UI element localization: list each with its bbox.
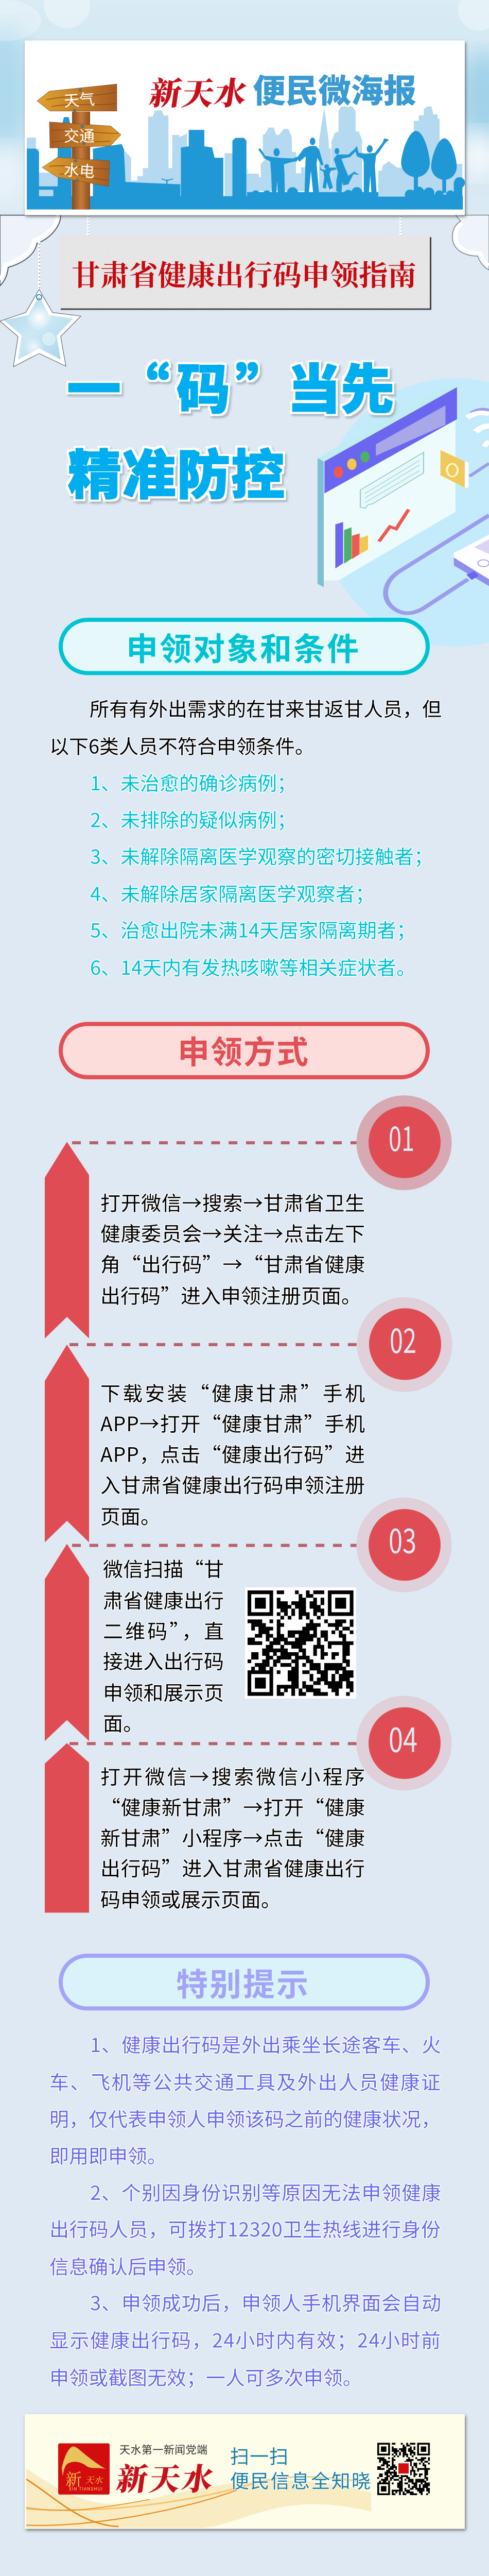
logo xyxy=(58,2443,110,2495)
footer call to action: 便民信息全知晓 xyxy=(230,2466,371,2494)
decorative clouds xyxy=(0,215,489,286)
step 1 xyxy=(45,1095,452,1338)
text xyxy=(100,1761,365,1913)
number badge 02 xyxy=(357,1297,452,1392)
text: eligibility intro: 以下6类人员不符合申领条件。 xyxy=(49,731,315,759)
text: 申领和展示页 xyxy=(103,1677,224,1706)
icon: gear card xyxy=(441,450,468,488)
text: 入甘肃省健康出行码申领注册 xyxy=(100,1470,365,1499)
banner title: 新天水 xyxy=(147,67,250,114)
text: special notes xyxy=(49,2029,441,2391)
sign: 交通 xyxy=(49,122,121,148)
text: “健康新甘肃”→打开“健康 xyxy=(100,1792,365,1821)
number badge 01: 01 xyxy=(389,1112,414,1161)
text xyxy=(103,1554,224,1737)
city skyline illustration xyxy=(27,107,465,210)
banner title: 便民微海报 xyxy=(253,65,416,112)
main title: 先 xyxy=(341,347,394,423)
icon: wooden signpost xyxy=(37,84,121,210)
text: 下载安装“健康甘肃”手机 xyxy=(100,1378,365,1407)
chat bubble xyxy=(360,452,424,509)
text: 肃省健康出行 xyxy=(103,1585,224,1614)
sign: 天气: 天气 xyxy=(63,87,95,111)
QR code xyxy=(245,1587,356,1699)
illustration: isometric browser window and phone xyxy=(318,378,489,647)
list: six excluded categories: 2、未排除的疑似病例； xyxy=(90,805,296,833)
gold waves xyxy=(26,2468,371,2528)
text: 打开微信→搜索微信小程序 xyxy=(100,1761,365,1790)
sign: 天气 xyxy=(37,84,117,112)
section heading: 申领对象和条件 xyxy=(61,620,428,673)
icon: hanging star xyxy=(0,290,81,367)
number badge 04: 04 xyxy=(389,1713,417,1761)
main title xyxy=(67,347,394,509)
logo: 天水 xyxy=(85,2473,103,2486)
text xyxy=(100,1378,365,1530)
text: APP→打开“健康甘肃”手机 xyxy=(100,1409,365,1437)
number badge 04 xyxy=(356,1696,452,1790)
arrow xyxy=(45,1142,89,1338)
text: 健康委员会→关注→点击左下 xyxy=(100,1218,365,1247)
main title: ” xyxy=(236,347,289,423)
footer QR code xyxy=(377,2444,430,2494)
section heading: 特别提示 xyxy=(61,1956,428,2008)
sign: 交通: 交通 xyxy=(64,124,95,146)
section heading: 申领方式: 申领方式 xyxy=(178,1026,308,1073)
step 4 xyxy=(45,1696,452,1913)
text: 微信扫描“甘 xyxy=(103,1554,224,1583)
text: 面。 xyxy=(103,1708,143,1737)
text: special notes: 明，仅代表申领人申领该码之前的健康状况， xyxy=(49,2104,441,2132)
text: 接进入出行码 xyxy=(103,1646,224,1675)
number badge 03 xyxy=(356,1498,452,1592)
arrow xyxy=(45,1345,89,1543)
footer call to action: 扫一扫 xyxy=(230,2441,288,2469)
text: eligibility intro xyxy=(49,693,442,759)
logo: 新 xyxy=(65,2467,82,2490)
icon: wifi arcs xyxy=(467,410,489,447)
arrow xyxy=(45,1743,89,1912)
text: special notes: 申领或截图无效；一人可多次申领。 xyxy=(49,2362,362,2391)
step 3 xyxy=(45,1498,452,1741)
list: six excluded categories xyxy=(90,768,433,980)
list: six excluded categories: 5、治愈出院未满14天居家隔离期者； xyxy=(90,915,416,943)
footer brand text: 新天水 xyxy=(114,2455,217,2499)
text: special notes: 显示健康出行码，24小时内有效；24小时前 xyxy=(49,2325,441,2353)
text: special notes: 2、个别因身份识别等原因无法申领健康 xyxy=(90,2177,441,2206)
number badge 01 xyxy=(356,1095,452,1190)
icon: trees xyxy=(247,131,465,210)
list: six excluded categories: 1、未治愈的确诊病例； xyxy=(90,768,296,796)
text: special notes: 3、申领成功后，申领人手机界面会自动 xyxy=(90,2287,441,2316)
main title: 一 xyxy=(67,347,121,423)
sign: 水电: 水电 xyxy=(63,157,96,182)
main title: “ xyxy=(116,347,169,423)
footer brand text: 天水第一新闻党端 xyxy=(119,2442,207,2457)
section heading: 申领对象和条件: 申领对象和条件 xyxy=(126,623,359,670)
text: 出行码”进入甘肃省健康出行 xyxy=(100,1853,365,1882)
step 2 xyxy=(45,1297,452,1543)
list: six excluded categories: 6、14天内有发热咳嗽等相关症状者。 xyxy=(90,952,416,980)
main title: 当 xyxy=(287,347,341,423)
text: eligibility intro: 所有有外出需求的在甘来甘返甘人员，但 xyxy=(90,693,442,722)
text: special notes: 信息确认后申领。 xyxy=(49,2251,206,2279)
text: 打开微信→搜索→甘肃省卫生 xyxy=(100,1188,365,1216)
list: six excluded categories: 4、未解除居家隔离医学观察者； xyxy=(90,878,375,907)
footer call to action xyxy=(230,2441,371,2494)
text: APP，点击“健康出行码”进 xyxy=(100,1439,365,1468)
subtitle paper sign xyxy=(59,235,431,310)
hanging chains xyxy=(39,215,401,295)
bar chart xyxy=(335,522,368,568)
text: special notes: 1、健康出行码是外出乘坐长途客车、火 xyxy=(90,2029,441,2058)
text xyxy=(100,1188,365,1309)
text: special notes: 即用即申领。 xyxy=(49,2141,167,2169)
text: 角“出行码”→“甘肃省健康 xyxy=(100,1249,365,1278)
icon: people silhouettes xyxy=(259,138,389,194)
footer banner xyxy=(25,2414,465,2529)
icon: phone xyxy=(454,535,489,586)
logo: XIN TIANSHUI xyxy=(69,2486,102,2492)
text: 出行码”进入申领注册页面。 xyxy=(100,1280,361,1309)
arrow xyxy=(45,1544,89,1741)
text: special notes: 车、飞机等公共交通工具及外出人员健康证 xyxy=(49,2067,441,2095)
list: six excluded categories: 3、未解除隔离医学观察的密切接触者； xyxy=(90,841,433,869)
banner title xyxy=(147,65,416,114)
banner card xyxy=(25,41,465,215)
text: 二维码”，直 xyxy=(103,1616,224,1645)
text: special notes: 出行码人员，可拨打12320卫生热线进行身份 xyxy=(49,2214,441,2242)
section heading: 申领方式 xyxy=(61,1024,428,1077)
number badge 03: 03 xyxy=(389,1515,416,1563)
main title: 码 xyxy=(177,347,230,423)
subtitle paper sign: 甘肃省健康出行码申领指南 xyxy=(72,252,416,294)
number badge 02: 02 xyxy=(390,1314,416,1363)
text: 新甘肃”小程序→点击“健康 xyxy=(100,1823,365,1852)
text: 页面。 xyxy=(100,1501,161,1530)
text: 码申领或展示页面。 xyxy=(100,1885,281,1913)
icon: rising arrow xyxy=(379,510,409,541)
section heading: 特别提示: 特别提示 xyxy=(176,1959,308,2005)
main title: 精准防控 xyxy=(68,432,285,509)
sign: 水电 xyxy=(42,157,110,187)
